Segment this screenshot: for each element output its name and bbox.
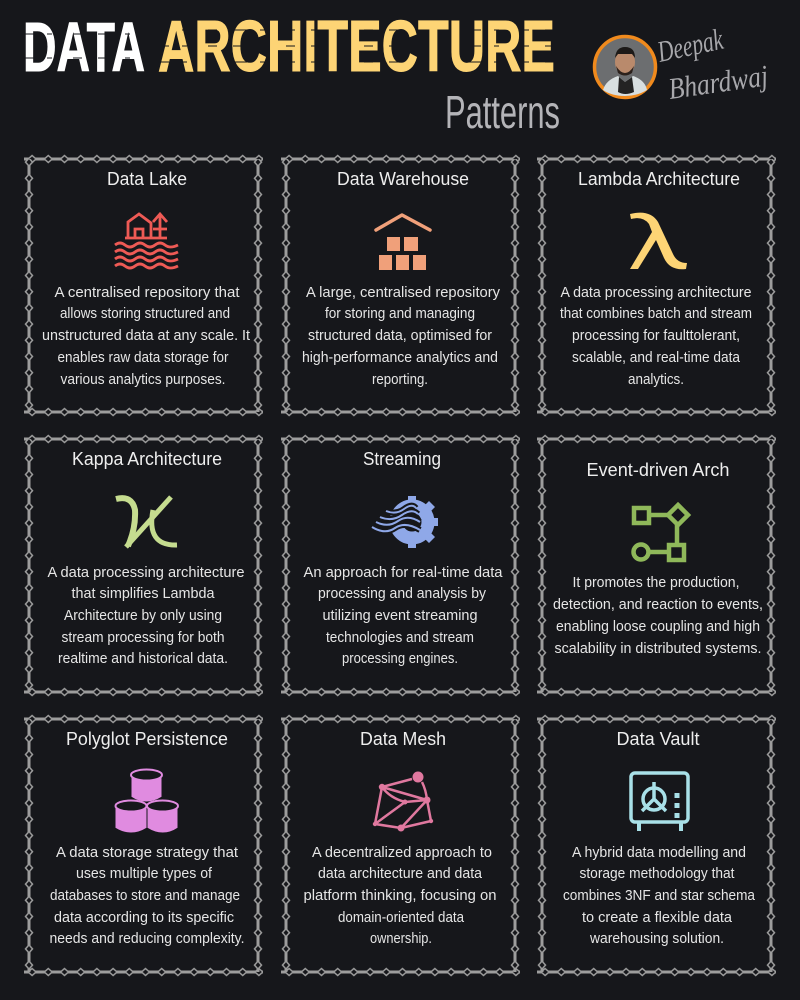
subtitle: Patterns: Patterns <box>445 86 560 138</box>
description: scalable, and real-time data <box>572 349 741 366</box>
description: domain-oriented data <box>338 909 465 926</box>
description <box>302 284 500 388</box>
description: that simplifies Lambda <box>72 585 215 602</box>
description: platform thinking, focusing on <box>304 887 496 904</box>
description: It promotes the production, <box>572 574 740 591</box>
panel frame <box>281 434 520 697</box>
icon: vault safe <box>631 773 688 831</box>
heading: Data Lake <box>107 169 187 189</box>
description <box>304 844 496 947</box>
description: A data storage strategy that <box>56 844 239 861</box>
icon: database stack <box>115 770 178 833</box>
description: needs and reducing complexity. <box>50 930 244 947</box>
author signature: Bhardwaj <box>666 59 770 106</box>
description <box>48 564 244 667</box>
panel: Data Vault <box>537 714 776 977</box>
panel: Data Warehouse <box>281 154 520 417</box>
description: warehousing solution. <box>589 930 724 947</box>
panel frame <box>24 434 263 697</box>
title <box>20 7 558 87</box>
description: for storing and managing <box>325 305 475 322</box>
panel frame <box>537 434 776 697</box>
panel frame <box>281 714 520 977</box>
description: that combines batch and stream <box>560 305 752 322</box>
icon: lake house <box>115 214 178 268</box>
description: utilizing event streaming <box>322 607 478 624</box>
heading: Event-driven Arch <box>586 460 730 480</box>
description <box>42 284 251 388</box>
icon: warehouse <box>376 215 430 270</box>
heading: Data Vault <box>616 729 700 749</box>
description: processing engines. <box>342 650 458 667</box>
description: analytics. <box>628 371 684 388</box>
description <box>304 564 503 667</box>
icon: kappa <box>116 497 177 547</box>
description: unstructured data at any scale. It <box>42 327 251 344</box>
heading: Data Mesh <box>360 729 446 749</box>
description: data according to its specific <box>54 909 234 926</box>
heading: Streaming <box>363 449 441 469</box>
description: allows storing structured and <box>60 305 230 322</box>
description: high-performance analytics and <box>302 349 498 366</box>
description: scalability in distributed systems. <box>554 640 762 657</box>
heading: Polyglot Persistence <box>66 729 228 749</box>
panel: Lambda Architecture <box>537 154 776 417</box>
description: Architecture by only using <box>64 607 222 624</box>
description: processing for faulttolerant, <box>572 327 740 344</box>
icon: event flow <box>634 505 688 560</box>
icon: mesh network <box>373 772 433 832</box>
heading: Lambda Architecture <box>578 169 740 189</box>
description: to create a flexible data <box>582 909 733 926</box>
description: ownership. <box>370 930 432 947</box>
description: various analytics purposes. <box>60 371 226 388</box>
description: detection, and reaction to events, <box>553 596 763 613</box>
panel: Event-driven Arch <box>537 434 776 697</box>
panel: Streaming <box>281 434 520 697</box>
description: A centralised repository that <box>54 284 240 301</box>
author portrait <box>594 36 656 98</box>
panel: Data Lake <box>24 154 263 417</box>
description: combines 3NF and star schema <box>563 887 756 904</box>
icon: streaming gear <box>372 496 438 548</box>
description <box>553 574 763 657</box>
author signature <box>654 23 770 106</box>
title: DATA <box>23 8 145 86</box>
description: A large, centralised repository <box>306 284 500 301</box>
description: A data processing architecture <box>48 564 244 581</box>
panel frame <box>537 714 776 977</box>
description <box>563 844 756 947</box>
description: An approach for real-time data <box>304 564 503 581</box>
description <box>50 844 244 947</box>
description: uses multiple types of <box>76 865 213 882</box>
description: stream processing for both <box>62 629 224 646</box>
panel frame <box>24 154 263 417</box>
title: ARCHITECTURE <box>158 7 555 87</box>
description: storage methodology that <box>580 865 735 882</box>
description: A hybrid data modelling and <box>572 844 746 861</box>
description: enables raw data storage for <box>58 349 228 366</box>
heading: Data Warehouse <box>337 169 469 189</box>
panel frame <box>537 154 776 417</box>
panel frame <box>24 714 263 977</box>
author signature: Deepak <box>654 23 726 69</box>
description: enabling loose coupling and high <box>556 618 760 635</box>
description: A decentralized approach to <box>312 844 492 861</box>
description: realtime and historical data. <box>58 650 228 667</box>
description: technologies and stream <box>326 629 474 646</box>
description: databases to store and manage <box>50 887 240 904</box>
description: A data processing architecture <box>560 284 752 301</box>
description: reporting. <box>372 371 428 388</box>
panel frame <box>281 154 520 417</box>
heading: Kappa Architecture <box>72 449 222 469</box>
description <box>560 284 752 388</box>
panel: Kappa Architecture <box>24 434 263 697</box>
icon: lambda <box>630 213 687 269</box>
panel: Data Mesh <box>281 714 520 977</box>
description: structured data, optimised for <box>308 327 492 344</box>
description: data architecture and data <box>318 865 483 882</box>
panel: Polyglot Persistence <box>24 714 263 977</box>
description: processing and analysis by <box>318 585 486 602</box>
